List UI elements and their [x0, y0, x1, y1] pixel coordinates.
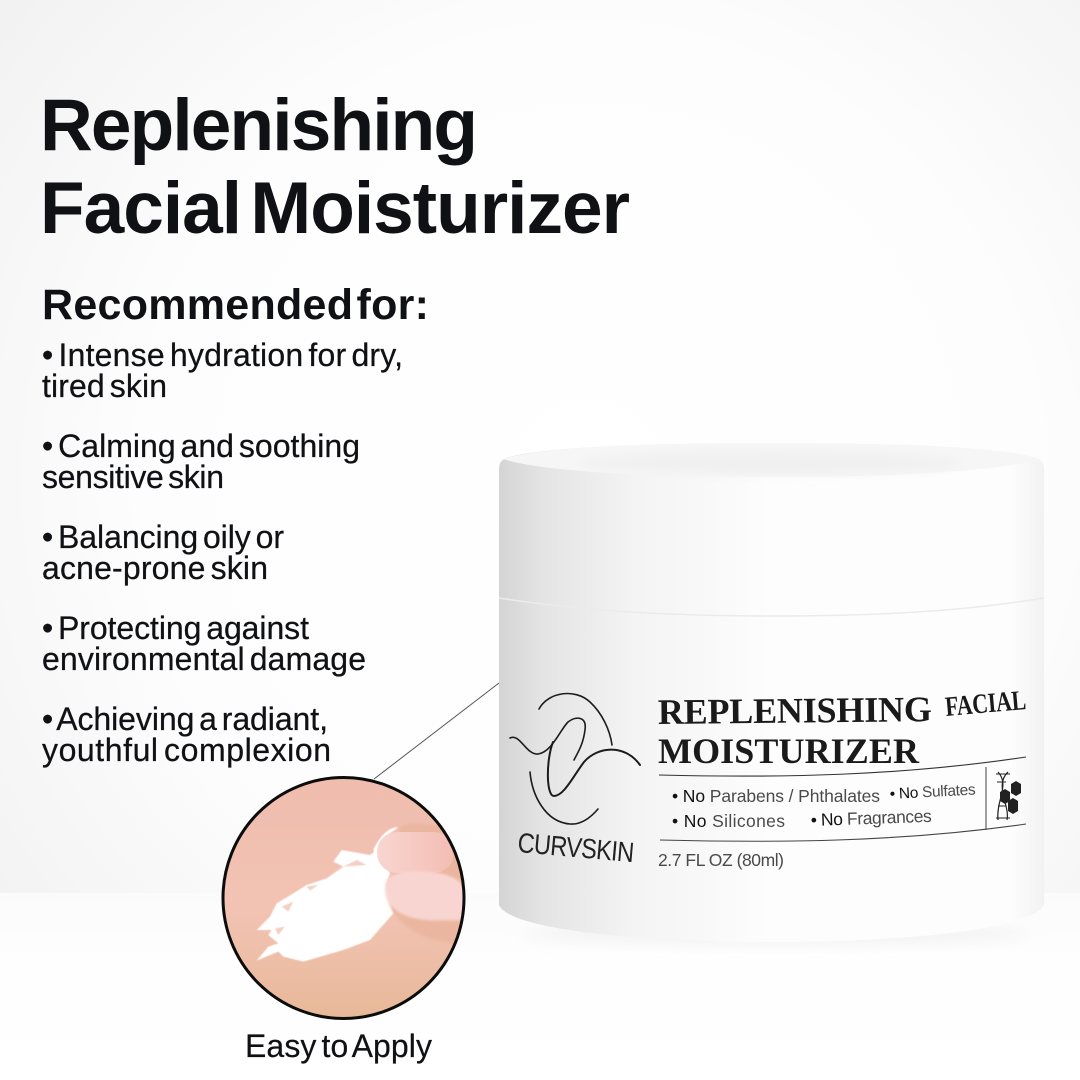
benefits list: • Protecting against: [42, 610, 309, 646]
floor: [0, 893, 1080, 1080]
jar top surface: [503, 443, 1040, 477]
benefits list: • Calming and soothing: [42, 428, 360, 464]
skin: [224, 778, 464, 1018]
product name on label: [658, 686, 1027, 771]
logo mark: [510, 694, 640, 824]
label rules: [659, 757, 1026, 776]
product name on label: REPLENISHING: [658, 689, 932, 732]
claims list: • No Parabens / Phthalates: [672, 786, 880, 806]
benefits list: environmental damage: [42, 641, 366, 677]
claims list: • No Sulfates: [889, 782, 976, 803]
title: Facial Moisturizer: [40, 168, 630, 249]
jar product: [499, 443, 1044, 942]
lid seam: [499, 598, 1044, 616]
fingers: [377, 824, 470, 945]
product name on label: MOISTURIZER: [658, 731, 920, 771]
cream smear: [257, 827, 398, 962]
benefits list: acne-prone skin: [42, 550, 268, 586]
icon: dna and molecules: [996, 772, 1021, 820]
title: Replenishing: [40, 85, 478, 166]
benefits list: [42, 337, 403, 768]
net weight: 2.7 FL OZ (80ml): [658, 850, 784, 870]
claims list: [672, 782, 976, 831]
callout line: [374, 683, 499, 779]
benefits list: • Achieving a radiant,: [42, 701, 328, 737]
lid recess: [580, 452, 960, 474]
claims list: • No Fragrances: [810, 806, 932, 830]
benefits list: • Intense hydration for dry,: [42, 337, 403, 373]
jar body and lid: [499, 443, 1044, 942]
product name on label: FACIAL: [944, 686, 1027, 723]
application swatch: [223, 778, 470, 1018]
jar shadow: [520, 926, 1030, 942]
brand name: CURVSKIN: [516, 828, 635, 869]
benefits list: youthful complexion: [42, 732, 331, 768]
subheading: recommended for: Recommended for:: [42, 281, 429, 329]
benefits list: tired skin: [42, 368, 167, 404]
swatch caption: Easy to Apply: [245, 1028, 432, 1064]
benefits list: sensitive skin: [42, 459, 224, 495]
swatch ring: [223, 778, 464, 1018]
claims list: • No Silicones: [672, 811, 785, 831]
title: [40, 85, 630, 249]
benefits list: • Balancing oily or: [42, 519, 284, 555]
